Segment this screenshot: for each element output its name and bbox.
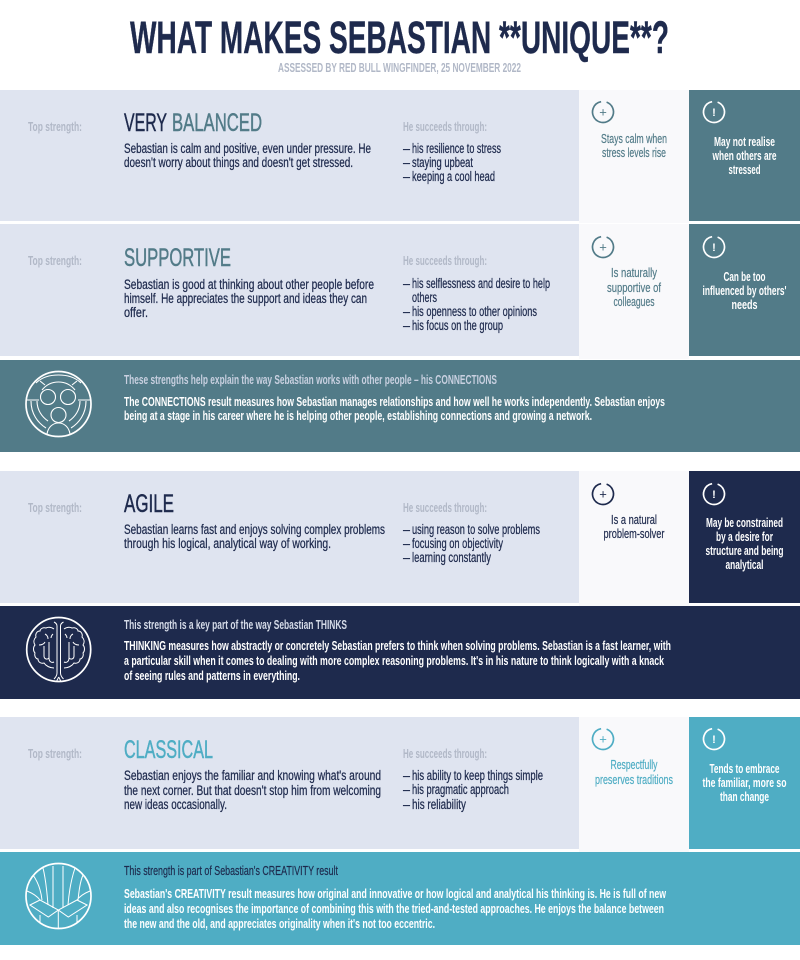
- subtitle: ASSESSED BY RED BULL WINGFINDER, 25 NOVEMBER 2022: [278, 60, 521, 75]
- panel: agile: problem-solver: [604, 526, 665, 541]
- panel: thinking band: [0, 606, 800, 699]
- panel: supportive: his selflessness and desire to help: [412, 276, 550, 291]
- panel: agile: Top strength:: [28, 500, 82, 515]
- panel: connections band: being at a stage in his career where he is helping other people, establishing connections and growing a network.: [124, 408, 592, 423]
- panel: classical: Sebastian enjoys the familiar and knowing what's around: [124, 768, 381, 783]
- panel: classical: his ability to keep things simple: [412, 768, 543, 783]
- panel: very balanced: BALANCED: [172, 109, 262, 137]
- panel: agile: +: [599, 486, 607, 502]
- panel: agile: !: [712, 489, 716, 501]
- panel: agile: —: [403, 550, 410, 565]
- panel: supportive: !: [712, 242, 716, 254]
- panel: agile: focusing on objectivity: [412, 536, 503, 551]
- panel: supportive: his focus on the group: [412, 318, 503, 333]
- panel: very balanced: his resilience to stress: [412, 141, 501, 156]
- panel: classical: !: [712, 734, 716, 746]
- panel: agile: Is a natural: [611, 512, 657, 527]
- panel: supportive: needs: [732, 297, 758, 312]
- panel: supportive: supportive of: [607, 280, 661, 295]
- panel: supportive: —: [403, 318, 410, 333]
- icon: connections people: [26, 372, 91, 436]
- panel: very balanced: Stays calm when: [601, 131, 667, 146]
- panel: classical: new ideas occasionally.: [124, 797, 227, 812]
- panel: very balanced: staying upbeat: [412, 155, 473, 170]
- panel: very balanced: keeping a cool head: [412, 169, 495, 184]
- panel: supportive: —: [403, 276, 410, 291]
- panel: classical: He succeeds through:: [403, 746, 487, 761]
- panel: supportive: offer.: [124, 305, 148, 320]
- panel: supportive: colleagues: [614, 294, 655, 309]
- panel: classical: his pragmatic approach: [412, 782, 509, 797]
- panel: classical: Top strength:: [28, 746, 82, 761]
- panel: classical: —: [403, 768, 410, 783]
- panel: supportive: Can be too: [724, 269, 766, 284]
- panel: agile: Sebastian learns fast and enjoys solving complex problems: [124, 522, 385, 537]
- panel: very balanced: —: [403, 141, 410, 156]
- panel: supportive: himself. He appreciates the support and ideas they can: [124, 291, 367, 306]
- panel: supportive: his openness to other opinions: [412, 304, 537, 319]
- icon: brain: [27, 618, 91, 682]
- panel: very balanced: Sebastian is calm and positive, even under pressure. He: [124, 141, 371, 156]
- panel: supportive: [0, 224, 800, 359]
- panel: very balanced: Top strength:: [28, 119, 82, 134]
- panel: agile: analytical: [726, 557, 764, 572]
- panel: classical: preserves traditions: [595, 772, 673, 787]
- panel: very balanced: [0, 90, 800, 223]
- panel: classical: the next corner. But that doesn't stop him from welcoming: [124, 783, 381, 798]
- panel: agile: —: [403, 522, 410, 537]
- panel: classical: [0, 717, 800, 852]
- panel: supportive: He succeeds through:: [403, 253, 487, 268]
- panel: classical: —: [403, 782, 410, 797]
- panel: very balanced: —: [403, 169, 410, 184]
- panel: supportive: —: [403, 304, 410, 319]
- panel: very balanced: +: [599, 104, 607, 120]
- panel: supportive: Sebastian is good at thinking about other people before: [124, 277, 374, 292]
- panel: supportive: others: [412, 290, 437, 305]
- panel: supportive: Top strength:: [28, 253, 82, 268]
- panel: classical: —: [403, 797, 410, 812]
- panel: thinking band: This strength is a key part of the way Sebastian THINKS: [124, 617, 347, 632]
- panel: agile: He succeeds through:: [403, 500, 487, 515]
- panel: classical: CLASSICAL: [124, 736, 213, 764]
- icon: open box with rays: [26, 864, 91, 928]
- panel: connections band: [0, 360, 800, 452]
- panel: very balanced: stressed: [728, 162, 761, 177]
- panel: supportive: +: [599, 240, 607, 254]
- panel: very balanced: stress levels rise: [602, 145, 666, 160]
- panel: agile: using reason to solve problems: [412, 522, 540, 537]
- panel: creativity band: [0, 852, 800, 945]
- panel: thinking band: of seeing rules and patterns in everything.: [124, 668, 300, 683]
- panel: creativity band: the new and the old, and appreciates originality when it's not too eccentric.: [124, 916, 435, 931]
- panel: classical: his reliability: [412, 797, 466, 812]
- panel: very balanced: VERY: [124, 109, 167, 137]
- panel: agile: AGILE: [124, 490, 174, 518]
- panel: classical: Respectfully: [610, 757, 658, 772]
- panel: very balanced: doesn't worry about things and doesn't get stressed.: [124, 155, 353, 170]
- panel: agile: —: [403, 536, 410, 551]
- panel: connections band: These strengths help explain the way Sebastian works with other people – his CONNECTIONS: [124, 372, 497, 387]
- panel: very balanced: —: [403, 155, 410, 170]
- panel: very balanced: He succeeds through:: [403, 119, 487, 134]
- panel: classical: +: [599, 732, 607, 746]
- panel: classical: than change: [720, 789, 769, 804]
- panel: supportive: Is naturally: [611, 265, 657, 280]
- panel: agile: learning constantly: [412, 550, 491, 565]
- panel: agile: [0, 471, 800, 606]
- panel: agile: through his logical, analytical way of working.: [124, 536, 331, 551]
- panel: supportive: SUPPORTIVE: [124, 244, 231, 272]
- panel: very balanced: !: [712, 107, 716, 119]
- panel: creativity band: This strength is part of Sebastian's CREATIVITY result: [124, 863, 338, 878]
